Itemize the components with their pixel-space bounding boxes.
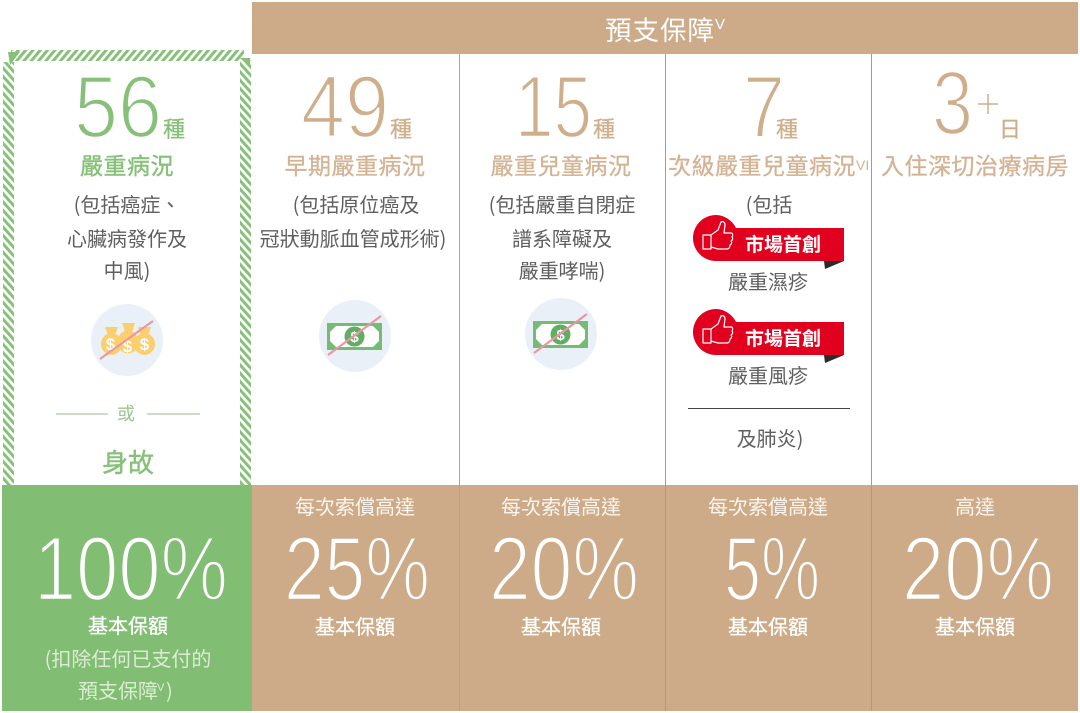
unit: 日 <box>999 112 1021 144</box>
icon: money bags crossed out <box>91 304 163 376</box>
description: 譜系障礙及 <box>512 223 612 252</box>
badge: market first <box>693 309 844 363</box>
description: 嚴重哮喘) <box>519 255 605 284</box>
description: 冠狀動脈血管成形術) <box>260 223 446 252</box>
icon: banknote crossed out: $ <box>350 329 359 346</box>
plus <box>978 94 998 114</box>
note: (扣除任何已支付的 <box>45 643 211 672</box>
basic sum label: 基本保額 <box>315 611 395 640</box>
column dividers <box>459 54 872 711</box>
header band: advance cover: 預支保障 <box>605 9 715 48</box>
panel: tan benefit 25% <box>252 485 459 711</box>
basic sum label: 基本保額 <box>935 611 1015 640</box>
percent: 5% <box>724 519 820 620</box>
up to label: 高達 <box>955 491 995 520</box>
percent: 20% <box>489 519 639 620</box>
description: 中風) <box>104 255 150 284</box>
unit: 種 <box>163 112 185 144</box>
description: (包括癌症、 <box>74 189 180 218</box>
title: 嚴重病況 <box>80 147 174 181</box>
badge: market first <box>693 215 844 269</box>
icon: banknote crossed out <box>525 298 597 370</box>
number: 56: 56 <box>74 57 162 156</box>
hatched frame <box>3 50 251 485</box>
description <box>260 189 446 252</box>
percent: 20% <box>902 519 1054 620</box>
title: 早期嚴重病況 <box>284 147 426 181</box>
note: V <box>157 682 165 694</box>
panel: tan benefit 5% <box>666 485 871 711</box>
title: VI <box>856 157 869 173</box>
panel: 3+ days intensive care <box>881 54 1069 181</box>
per claim label: 每次索償高達 <box>501 491 621 520</box>
title: 次級嚴重兒童病況 <box>668 147 856 181</box>
icon: banknote crossed out <box>319 300 391 372</box>
number: 3: 3 <box>932 54 973 154</box>
panel: 15 severe child illnesses <box>489 57 635 370</box>
unit: 種 <box>593 112 615 144</box>
percent: 100% <box>34 519 228 620</box>
basic sum label: 基本保額 <box>521 611 601 640</box>
note: 預支保障 <box>78 675 158 704</box>
icon: money bags crossed out: $ <box>106 335 116 354</box>
description <box>489 189 635 284</box>
panel: 7 secondary child illnesses <box>668 57 869 452</box>
unit: 種 <box>390 112 412 144</box>
unit: 種 <box>776 112 798 144</box>
basic sum label: 基本保額 <box>88 610 168 639</box>
death label: 身故 <box>102 443 154 480</box>
note: ) <box>166 675 173 704</box>
item: severe urticaria: 嚴重風疹 <box>728 360 808 389</box>
number: 7: 7 <box>743 57 785 156</box>
title: 嚴重兒童病況 <box>490 147 632 181</box>
panel: 49 early stage illnesses <box>260 57 446 372</box>
badge: market first: 市場首創 <box>745 230 821 257</box>
icon: banknote crossed out: $ <box>556 327 565 344</box>
header band: advance cover: V <box>715 16 725 33</box>
item: pneumonia: 及肺炎) <box>737 423 803 452</box>
panel: tan benefit up to 20% <box>872 485 1078 711</box>
panel: 56 severe illnesses (hatched frame) <box>3 50 251 485</box>
percent: 25% <box>284 519 430 620</box>
description start: (包括 <box>746 189 792 218</box>
number: 15: 15 <box>515 57 592 156</box>
item: severe eczema: 嚴重濕疹 <box>728 266 808 295</box>
per claim label: 每次索償高達 <box>708 491 828 520</box>
description <box>67 189 187 284</box>
header band: advance cover <box>252 2 1078 54</box>
icon: money bags crossed out: $ <box>123 337 133 356</box>
basic sum label: 基本保額 <box>728 611 808 640</box>
panel: tan benefit 20% <box>460 485 665 711</box>
icon: money bags crossed out: $ <box>140 335 150 354</box>
description: 心臟病發作及 <box>67 223 187 252</box>
per claim label: 每次索償高達 <box>295 491 415 520</box>
number: 49: 49 <box>301 57 389 156</box>
description: (包括嚴重自閉症 <box>489 189 635 218</box>
description: (包括原位癌及 <box>293 189 419 218</box>
badge: market first: 市場首創 <box>745 324 821 351</box>
title: 入住深切治療病房 <box>881 147 1069 181</box>
divider: or: 或 <box>117 400 135 426</box>
panel: green benefit 100% <box>2 485 252 711</box>
note <box>45 643 211 704</box>
